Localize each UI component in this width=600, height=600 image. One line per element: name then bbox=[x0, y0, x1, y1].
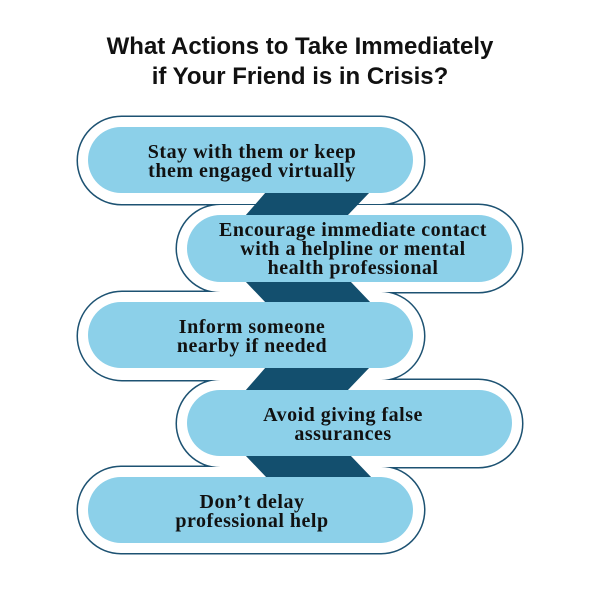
step 4 bbox=[187, 390, 512, 456]
title bbox=[107, 33, 494, 90]
step 4: Avoid giving false bbox=[263, 404, 423, 426]
step 2: health professional bbox=[268, 257, 438, 279]
step 5: professional help bbox=[175, 510, 329, 532]
step 5 bbox=[88, 477, 413, 543]
title: if Your Friend is in Crisis? bbox=[152, 63, 448, 90]
step 2: Encourage immediate contact bbox=[219, 219, 487, 241]
connectors bbox=[245, 192, 372, 478]
outlines bbox=[78, 117, 522, 553]
step 2: with a helpline or mental bbox=[240, 238, 466, 260]
step 1: them engaged virtually bbox=[148, 160, 356, 182]
step 1 bbox=[88, 127, 413, 193]
step 1: Stay with them or keep bbox=[148, 141, 356, 163]
step 5: Don’t delay bbox=[200, 491, 304, 513]
step 3: nearby if needed bbox=[177, 335, 327, 357]
step 3: Inform someone bbox=[179, 316, 325, 338]
step 3 bbox=[88, 302, 413, 368]
title: What Actions to Take Immediately bbox=[107, 33, 494, 60]
step 4: assurances bbox=[294, 423, 392, 445]
step 2 bbox=[187, 215, 512, 282]
